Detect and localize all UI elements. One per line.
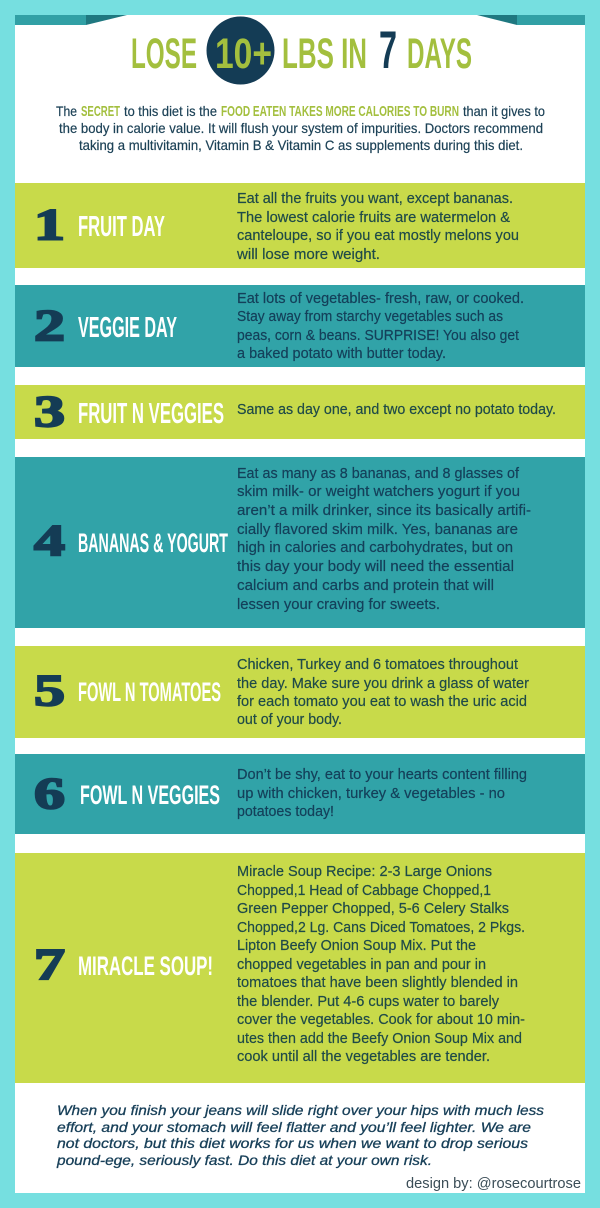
heading: fruit day: FRUIT DAY (78, 211, 165, 243)
closing note: pound-ege, seriously fast. Do this diet at your own risk. (56, 1152, 432, 1168)
number 1: 1 (34, 200, 65, 249)
description: day 1: will lose more weight. (236, 246, 380, 263)
intro text: SECRET (81, 103, 120, 120)
title: 7 (379, 21, 397, 80)
description: day 1: canteloupe, so if you eat mostly melons you (237, 227, 519, 244)
description: day 7: cover the vegetables. Cook for about 10 min- (237, 1011, 525, 1028)
intro text: to this diet is the (124, 103, 217, 119)
number 5: 5 (34, 666, 65, 715)
description: day 3: Same as day one, and two except no potato today. (237, 401, 556, 418)
description: day 7: Green Pepper Chopped, 5-6 Celery Stalks (237, 900, 509, 917)
description: day 5: Chicken, Turkey and 6 tomatoes throughout (237, 656, 519, 673)
intro text: taking a multivitamin, Vitamin B & Vitamin C as supplements during this diet. (79, 137, 523, 153)
title: LBS IN (282, 30, 367, 78)
number 3: 3 (34, 387, 65, 436)
heading: bananas and yogurt: BANANAS & YOGURT (78, 528, 228, 558)
number 4: 4 (34, 516, 65, 565)
description: day 2 (237, 290, 524, 362)
intro text: FOOD EATEN TAKES MORE CALORIES TO BURN (221, 103, 459, 120)
closing note: not doctors, but this diet works for us when we want to drop serious (57, 1135, 528, 1151)
intro text (56, 103, 545, 153)
title: LOSE (131, 30, 197, 78)
description: day 2: peas, corn & beans. SURPRISE! You also get (237, 327, 520, 344)
number 6: 6 (34, 769, 65, 818)
closing note (56, 1102, 544, 1168)
panel: day 7 miracle soup (15, 853, 585, 1083)
number 7: 7 (34, 940, 65, 989)
description: day 4: Eat as many as 8 bananas, and 8 glasses of (237, 465, 520, 482)
description: day 4: calcium and carbs and protein that will (237, 577, 494, 594)
description: day 4: high in calories and carbohydrates, but on (237, 539, 513, 556)
panel: day 5 fowl n tomatoes (15, 646, 585, 738)
description: day 7 (237, 863, 525, 1065)
ribbon: right corner (477, 15, 585, 25)
description: day 7: the blender. Put 4-6 cups water to barely (237, 993, 499, 1010)
description: day 4: lessen your craving for sweets. (237, 596, 440, 613)
badge: 10+ (206, 16, 274, 84)
description: day 7: tomatoes that have been slightly blended in (237, 974, 518, 991)
intro text: the body in calorie value. It will flush your system of impurities. Doctors recommend (59, 120, 543, 136)
intro text: The (56, 103, 77, 119)
description: day 5: out of your body. (237, 711, 342, 728)
badge: 10+: 10+ (215, 30, 272, 78)
description: day 4 (237, 465, 531, 613)
description: day 1 (236, 190, 519, 263)
heading: fowl n tomatoes: FOWL N TOMATOES (78, 677, 221, 707)
heading: fruit n veggies: FRUIT N VEGGIES (78, 398, 224, 430)
description: day 4: this day your body will need the essential (237, 558, 514, 575)
description: day 2: Stay away from starchy vegetables such as (237, 308, 503, 325)
number 2: 2 (34, 301, 65, 350)
description: day 2: a baked potato with butter today. (237, 345, 446, 362)
description: day 6 (237, 766, 527, 820)
description: day 5: the day. Make sure you drink a glass of water (237, 675, 529, 692)
description: day 6: Don’t be shy, eat to your hearts content filling (237, 766, 527, 783)
heading: fowl n veggies: FOWL N VEGGIES (80, 780, 220, 810)
description: day 7: chopped vegetables in pan and pour in (237, 956, 486, 973)
description: day 7: utes then add the Beefy Onion Soup Mix and (237, 1030, 522, 1047)
panel: day 1 fruit day (15, 183, 585, 268)
description: day 4: skim milk- or weight watchers yogurt if you (237, 483, 520, 500)
description: day 6: potatoes today! (237, 803, 334, 820)
description: day 6: up with chicken, turkey & vegetables - no (237, 785, 505, 802)
description: day 4: cially flavored skim milk. Yes, bananas are (237, 521, 518, 538)
closing note: When you finish your jeans will slide right over your hips with much less (57, 1102, 544, 1118)
intro text: than it gives to (463, 103, 545, 119)
description: day 7: Chopped,2 Lg. Cans Diced Tomatoes, 2 Pkgs. (237, 919, 525, 936)
description: day 4: aren’t a milk drinker, since its basically artifi- (237, 502, 531, 519)
description: day 1: The lowest calorie fruits are watermelon & (237, 209, 510, 226)
description: day 7: Chopped,1 Head of Cabbage Chopped,1 (237, 882, 491, 899)
description: day 2: Eat lots of vegetables- fresh, raw, or cooked. (237, 290, 524, 307)
title: DAYS (407, 30, 472, 78)
panel: day 3 fruit n veggies (15, 385, 585, 439)
closing note: effort, and your stomach will feel flatter and you’ll feel lighter. We are (57, 1119, 531, 1135)
heading: miracle soup: MIRACLE SOUP! (78, 951, 213, 981)
description: day 7: cook until all the vegetables are tender. (237, 1048, 490, 1065)
description: day 5: for each tomato you eat to wash the uric acid (237, 693, 527, 710)
panel: day 4 bananas and yogurt (15, 457, 585, 628)
description: day 7: Lipton Beefy Onion Soup Mix. Put the (237, 937, 476, 954)
description: day 5 (237, 656, 529, 728)
description: day 7: Miracle Soup Recipe: 2-3 Large Onions (237, 863, 492, 880)
panel: day 2 veggie day (15, 285, 585, 367)
design credit: design by: @rosecourtrose (406, 1176, 581, 1192)
ribbon: left corner (15, 15, 127, 25)
heading: veggie day: VEGGIE DAY (78, 312, 177, 344)
description: day 1: Eat all the fruits you want, except bananas. (237, 190, 513, 207)
title (131, 16, 472, 84)
panel: day 6 fowl n veggies (15, 754, 585, 834)
